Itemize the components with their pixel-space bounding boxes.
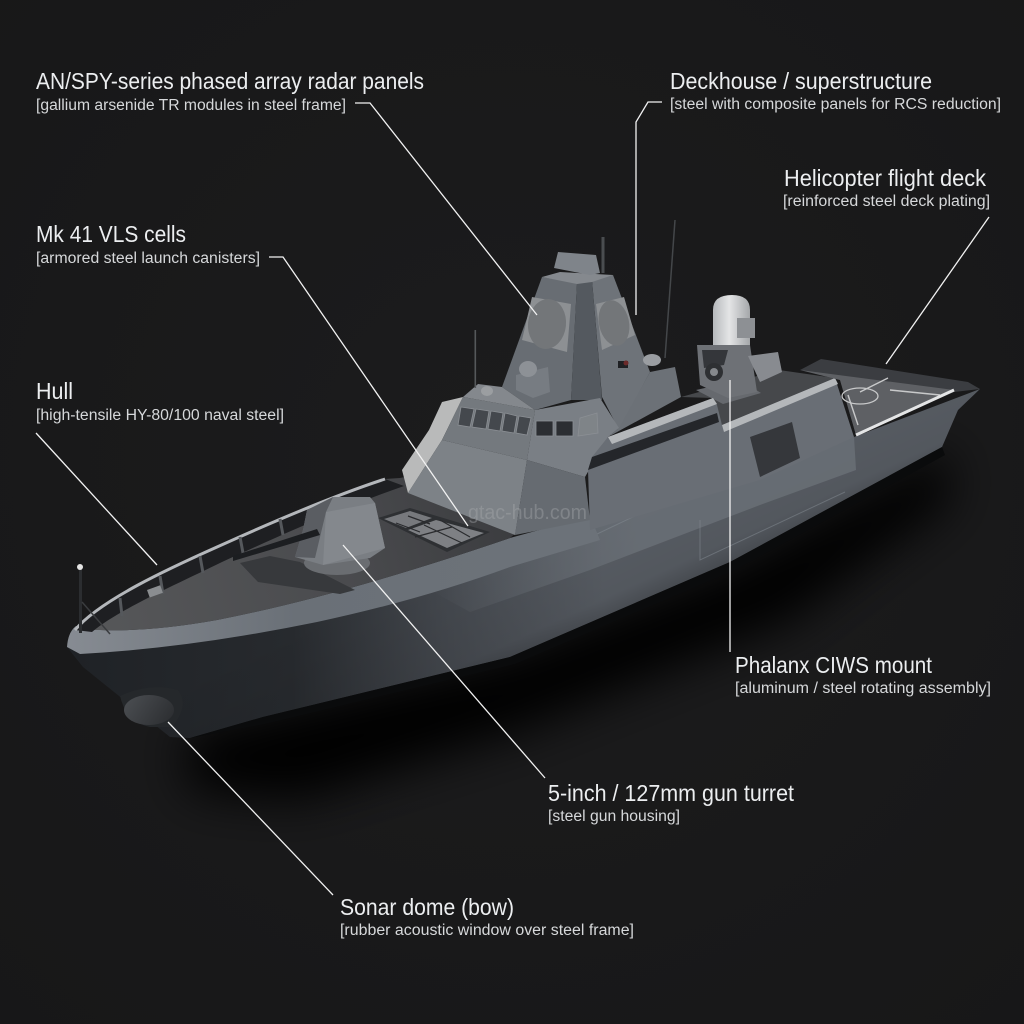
tower left face <box>502 277 577 410</box>
label: flight deck: Helicopter flight deck <box>784 165 986 191</box>
tower centre face <box>571 280 602 400</box>
roof <box>463 384 535 410</box>
intake recess <box>750 422 800 477</box>
tower right face <box>592 275 650 430</box>
gun barrel <box>233 529 320 561</box>
bow jackstaff <box>77 564 110 634</box>
deckhouse <box>402 330 619 535</box>
label: gun: [steel gun housing] <box>548 808 680 825</box>
label: flight deck: [reinforced steel deck plating] <box>783 193 990 210</box>
radar housing <box>554 252 600 275</box>
label: deckhouse <box>670 68 1001 113</box>
main mast tower <box>502 237 681 437</box>
far-side bulwark <box>75 479 404 632</box>
label: hull <box>36 378 284 424</box>
label: Phalanx <box>735 652 991 697</box>
label: gun: 5-inch / 127mm gun turret <box>548 780 795 806</box>
lower front face <box>408 440 527 535</box>
mast <box>602 237 604 273</box>
label: VLS: [armored steel launch canisters] <box>36 250 260 267</box>
foredeck <box>75 470 525 630</box>
label: radar: [gallium arsenide TR modules in steel frame] <box>36 97 346 114</box>
Phalanx CIWS <box>696 295 782 404</box>
leader lines <box>36 102 989 895</box>
ship <box>67 220 980 738</box>
small mast and sensor <box>474 330 493 396</box>
label: gun <box>548 780 795 825</box>
label: Phalanx: Phalanx CIWS mount <box>735 652 933 678</box>
label: VLS: Mk 41 VLS cells <box>36 221 186 247</box>
mid deck <box>681 370 835 425</box>
sensor box <box>516 367 550 398</box>
label: sonar <box>340 894 634 939</box>
label: hull: [high-tensile HY-80/100 naval steel] <box>36 407 284 424</box>
label: flight deck <box>783 165 990 210</box>
label: deckhouse: Deckhouse / superstructure <box>670 68 932 94</box>
gunwale band <box>67 516 600 654</box>
label: sonar: Sonar dome (bow) <box>340 894 514 920</box>
radar panel right <box>596 297 635 350</box>
bridge windows <box>458 407 598 436</box>
water reflection <box>185 450 950 800</box>
label: radar <box>36 68 424 114</box>
lower right face <box>515 460 590 535</box>
label: deckhouse: [steel with composite panels for RCS reduction] <box>670 96 1001 113</box>
label: Phalanx: [aluminum / steel rotating assembly] <box>735 680 991 697</box>
dark strip <box>588 413 719 470</box>
light facet <box>402 397 463 493</box>
label: VLS <box>36 221 260 267</box>
breakwater <box>240 556 355 594</box>
watermark: gtac-hub.com <box>468 502 587 524</box>
upper front face <box>442 397 535 460</box>
VLS cells <box>378 508 490 552</box>
upper right face <box>527 398 619 477</box>
hull <box>67 389 980 738</box>
sonar dome <box>120 687 183 727</box>
gun turret <box>233 497 385 575</box>
aft antenna <box>665 220 675 358</box>
flight deck <box>800 359 980 435</box>
midship side <box>588 378 854 530</box>
label: hull: Hull <box>36 378 73 404</box>
label: sonar: [rubber acoustic window over steel frame] <box>340 922 634 939</box>
radar panel left <box>522 297 571 352</box>
label: radar: AN/SPY-series phased array radar panels <box>36 68 424 94</box>
